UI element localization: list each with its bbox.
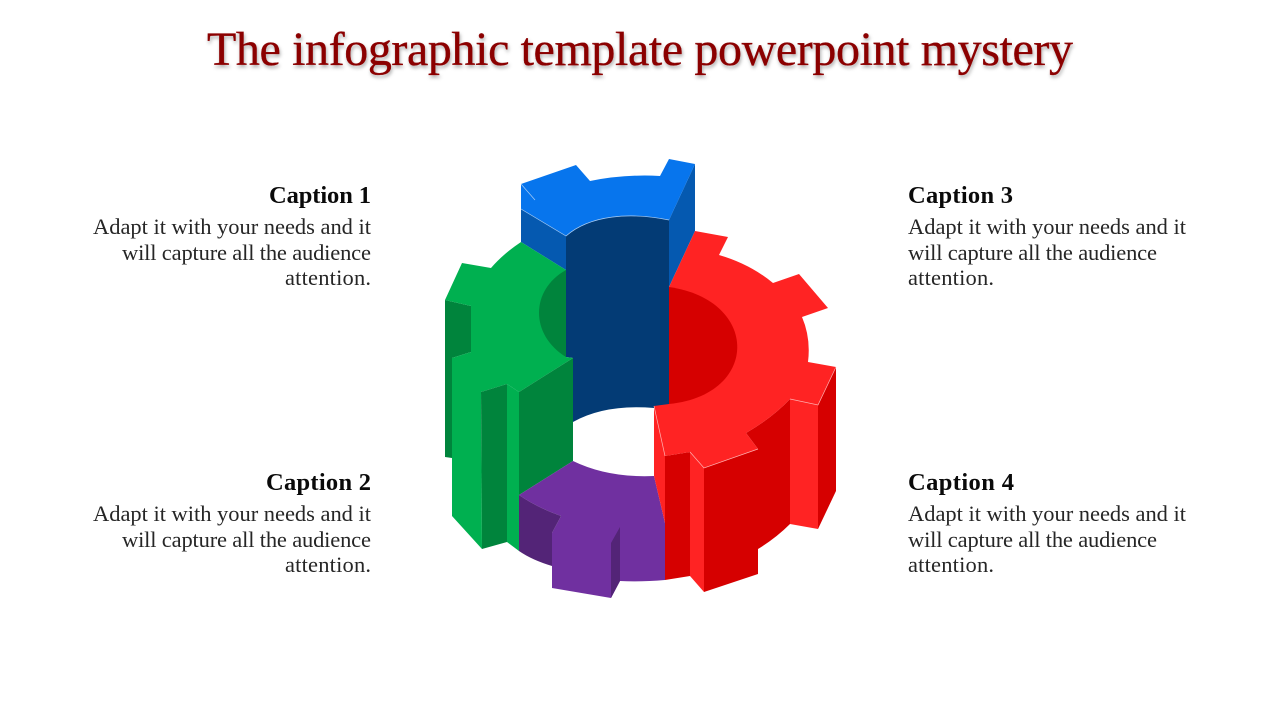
text block: caption 4: will capture all the audience (908, 527, 1157, 552)
text block: caption 2: Adapt it with your needs and it (93, 501, 372, 526)
text block: caption 3: Adapt it with your needs and it (908, 214, 1187, 239)
3D gear diagram (445, 159, 836, 598)
text block: caption 3 (908, 182, 1187, 290)
text block: caption 3: attention. (908, 265, 994, 290)
text block: caption 1: attention. (285, 265, 371, 290)
text block: caption 1: Caption 1 (269, 182, 371, 209)
text block: caption 4 (908, 469, 1187, 577)
gear segment: red (654, 231, 836, 592)
gear segment: blue (521, 159, 695, 422)
text block: caption 2: Caption 2 (266, 469, 371, 496)
text block: caption 1: Adapt it with your needs and it (93, 214, 372, 239)
text block: caption 2 (93, 469, 372, 577)
text block: caption 1 (93, 182, 372, 290)
text block: caption 4: Caption 4 (908, 469, 1014, 496)
text block: caption 1: will capture all the audience (122, 240, 371, 265)
text block: caption 2: attention. (285, 552, 371, 577)
gear segment: green (445, 242, 573, 551)
title: The infographic template powerpoint mystery (207, 23, 1073, 76)
text block: caption 4: Adapt it with your needs and it (908, 501, 1187, 526)
gear segment: purple (519, 461, 665, 598)
text block: caption 3: will capture all the audience (908, 240, 1157, 265)
text block: caption 4: attention. (908, 552, 994, 577)
text block: caption 3: Caption 3 (908, 182, 1013, 209)
text block: caption 2: will capture all the audience (122, 527, 371, 552)
